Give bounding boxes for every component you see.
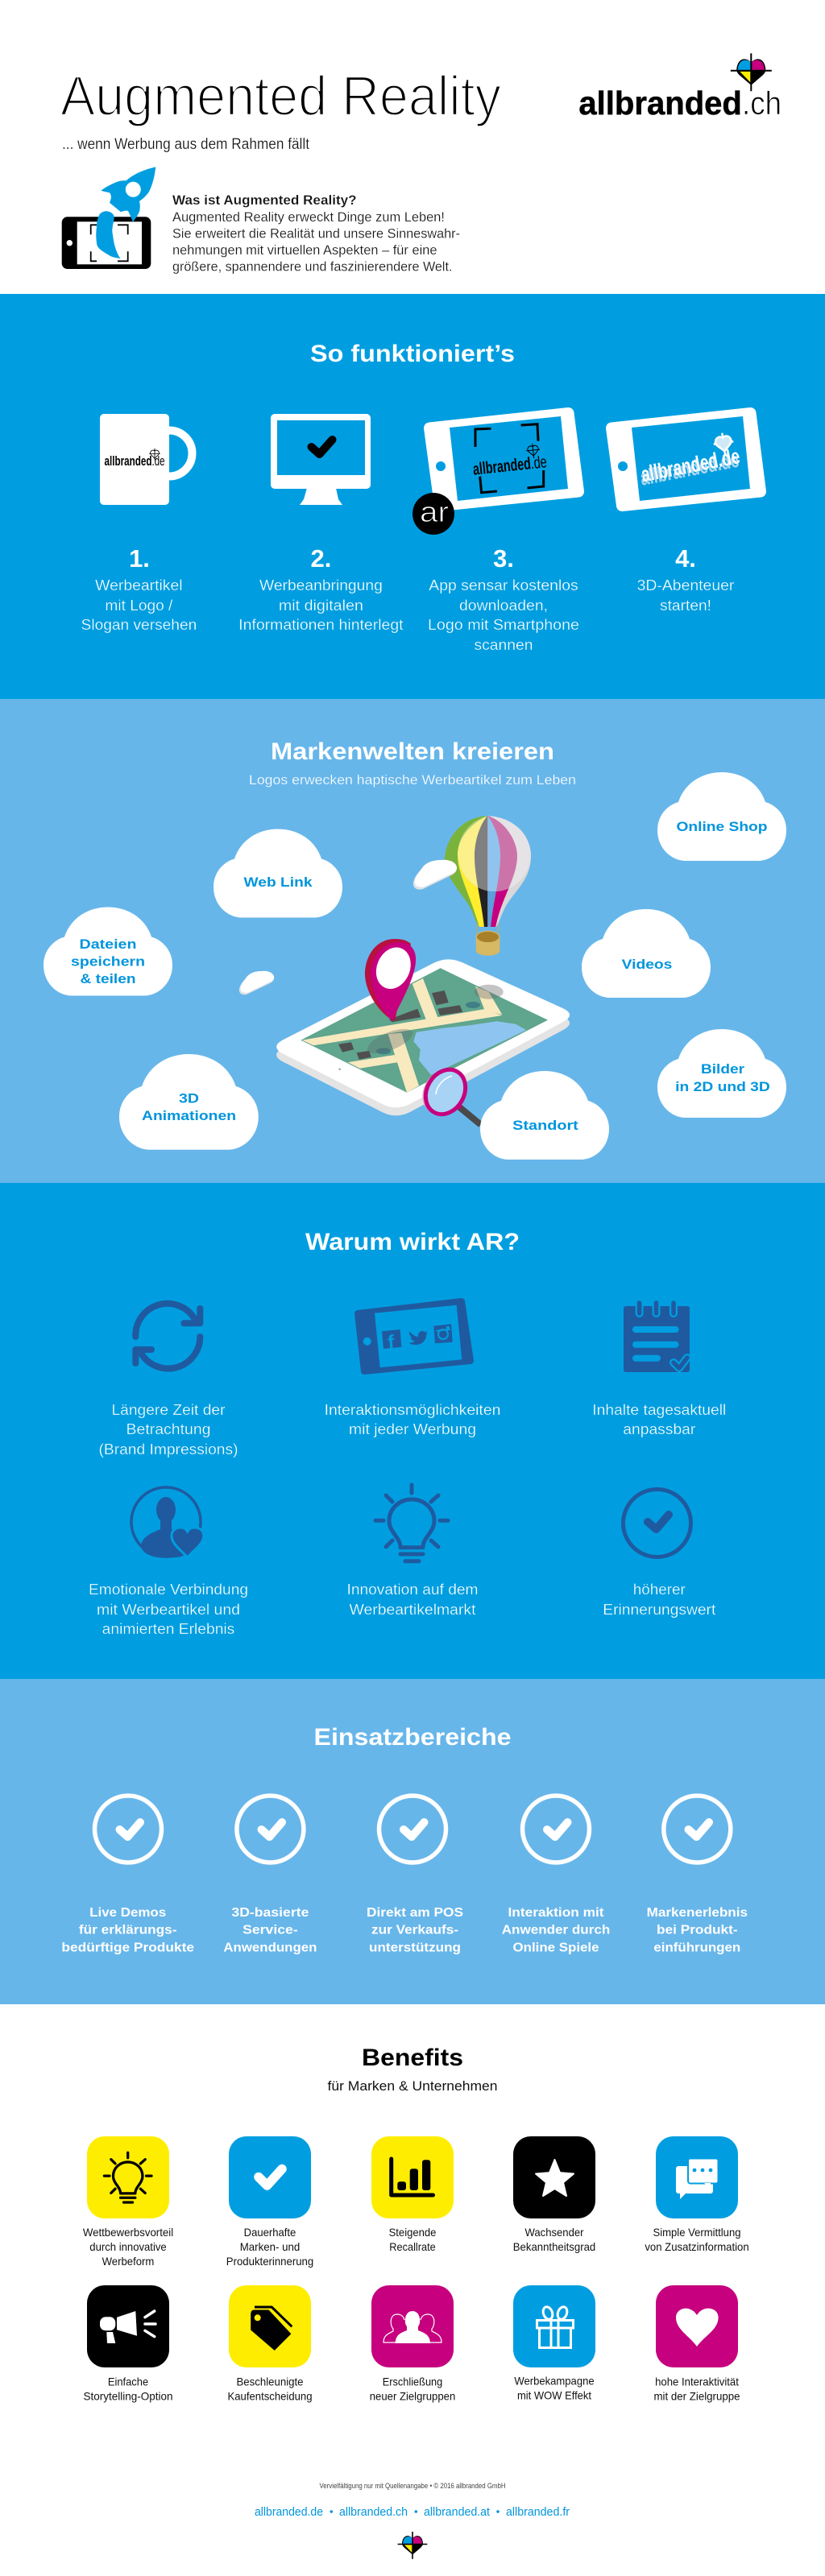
- cloud: Dateien speichern & teilen: & teilen: [81, 971, 135, 986]
- icon: refresh: [135, 1304, 200, 1368]
- item: Live Demos: [61, 1796, 194, 1955]
- cloud: Online Shop: [657, 772, 786, 861]
- cloud: Videos: [582, 909, 711, 998]
- icon: tablet with social media: [358, 1301, 471, 1371]
- benefit: Dauerhafte Erinnerung: Dauerhafte: [244, 2226, 296, 2239]
- text: Innovation: Innovation auf dem: [346, 1582, 479, 1598]
- domain links: [255, 2505, 570, 2519]
- step 2: 2.: [310, 544, 331, 573]
- cloud: Dateien speichern & teilen: [44, 907, 172, 995]
- icon: person with heart: [131, 1487, 204, 1558]
- cloud: Online Shop: Online Shop: [677, 819, 767, 834]
- small cloud left: [239, 971, 274, 994]
- panel: Warum wirkt AR?: [0, 1183, 825, 1679]
- header: [60, 53, 781, 274]
- cloud: Standort: [480, 1071, 609, 1160]
- step 3: 3.: [493, 544, 514, 573]
- text: Inhalte tagesaktuell: anpassbar: [623, 1421, 695, 1437]
- domain links: allbranded.de: [255, 2505, 323, 2519]
- benefit: Storytelling: Storytelling-Option: [84, 2390, 172, 2403]
- text block: Was ist Augmented Reality: Augmented Reality erweckt Dinge zum Leben!: [172, 210, 445, 225]
- step 3: App sensar kostenlos: [429, 577, 578, 593]
- cloud: Videos: Videos: [622, 957, 672, 972]
- benefit: Wachsender Bekanntheitsgrad: Bekanntheitsgrad: [513, 2240, 595, 2253]
- benefit: Kaufentscheidung: Kaufentscheidung: [227, 2390, 313, 2403]
- icon: magnifier: [415, 1062, 481, 1125]
- logo: allbranded.ch: [578, 53, 781, 122]
- subheading: Logos erwecken haptische Werbeartikel zum Leben: [249, 772, 576, 788]
- item: 3D-basierte: [223, 1796, 317, 1955]
- benefit: Wettbewerbsvorteil: durch innovative: [89, 2240, 167, 2253]
- step 4: 4.: [675, 544, 696, 573]
- text: Emotionale Verbindung: Emotionale Verbindung: [89, 1582, 248, 1598]
- step 1: Werbeartikel: [95, 577, 183, 593]
- item: 3D-basierte: Service-: [243, 1924, 298, 1937]
- icon: light bulb: [375, 1485, 448, 1561]
- domain links: allbranded.fr: [506, 2505, 570, 2519]
- step 4: starten!: [660, 597, 711, 614]
- step 2: Werbeanbringung: [259, 577, 383, 593]
- benefit: Storytelling: Einfache: [108, 2375, 148, 2388]
- item: Direkt am POS: unterstützung: [369, 1941, 461, 1955]
- heading: So funktioniert’s: [310, 341, 515, 367]
- text: Emotionale Verbindung: animierten Erlebnis: [102, 1621, 234, 1637]
- benefit: Interaktivität: hohe Interaktivität: [655, 2375, 739, 2388]
- cloud: Standort: Standort: [512, 1118, 578, 1133]
- benefit: Steigende Recallrate: Steigende: [389, 2226, 437, 2239]
- step 2: [238, 544, 404, 633]
- benefit: Wettbewerbsvorteil: [83, 2136, 173, 2268]
- text: Längere Zeit: [98, 1402, 238, 1458]
- footer: [255, 2482, 570, 2559]
- cloud: Web Link: Web Link: [243, 875, 313, 890]
- icon: heart crosshair: [731, 53, 772, 91]
- text: Interaktionsmöglichkeiten: mit jeder Werbung: [349, 1421, 476, 1437]
- subtitle: ... wenn Werbung aus dem Rahmen fällt: [62, 136, 310, 153]
- text block: Was ist Augmented Reality: nehmungen mit virtuellen Aspekten – für eine: [172, 243, 437, 258]
- item: Interaktion: Online Spiele: [512, 1941, 599, 1955]
- text: Längere Zeit: Längere Zeit der: [111, 1402, 226, 1418]
- benefit: Kaufentscheidung: Beschleunigte: [237, 2375, 304, 2388]
- cloud: 3D Animationen: 3D: [179, 1090, 199, 1106]
- logo: allbranded.ch: .ch: [742, 85, 781, 122]
- cloud: 3D Animationen: Animationen: [142, 1108, 236, 1123]
- step 2: mit digitalen: [279, 597, 363, 614]
- item: Direkt am POS: zur Verkaufs-: [371, 1924, 458, 1937]
- icon: map pin: [365, 939, 417, 1021]
- title: Augmented Reality: [60, 64, 501, 127]
- benefit: WOW Effekt: mit WOW Effekt: [517, 2388, 591, 2401]
- step 1: [81, 544, 197, 633]
- benefit: WOW Effekt: [513, 2285, 595, 2401]
- item: Interaktion: Anwender durch: [502, 1924, 610, 1937]
- step 2: Informationen hinterlegt: [238, 616, 404, 633]
- benefit: Dauerhafte Erinnerung: Produkterinnerung: [226, 2255, 313, 2268]
- step 1: 1.: [129, 544, 150, 573]
- item: Markenerlebnis: einführungen: [653, 1941, 740, 1955]
- benefit: Wachsender Bekanntheitsgrad: Wachsender: [525, 2226, 584, 2239]
- item: Live Demos: Live Demos: [89, 1906, 166, 1920]
- step 1: Slogan versehen: [81, 616, 197, 633]
- text: Inhalte tagesaktuell: Inhalte tagesaktuell: [592, 1402, 726, 1418]
- illustration: hot air balloon: [445, 816, 531, 956]
- text block: Was ist Augmented Reality: größere, spannendere und faszinierendere Welt.: [172, 259, 453, 274]
- panel: So funktioniert's: [0, 294, 825, 699]
- benefit: Storytelling: [84, 2285, 172, 2403]
- benefit: Steigende Recallrate: Recallrate: [389, 2240, 436, 2253]
- cloud: Web Link: [214, 829, 342, 918]
- small cloud near balloon: [413, 860, 457, 890]
- cloud: Bilder in 2D und 3D: in 2D und 3D: [675, 1079, 770, 1094]
- text block: Was ist Augmented Reality: Was ist Augmented Reality?: [172, 193, 357, 208]
- step 3: downloaden,: [459, 597, 548, 614]
- step 1: mit Logo /: [105, 597, 173, 614]
- panel: Benefits: [83, 2045, 749, 2403]
- cloud: 3D Animationen: [119, 1054, 259, 1150]
- text: höherer Erinnerungswert: höherer: [633, 1582, 686, 1598]
- text: Innovation: Werbeartikelmarkt: [350, 1602, 475, 1618]
- benefit: Simple Vermittlung: Simple Vermittlung: [653, 2226, 741, 2239]
- benefit: Simple Vermittlung: [645, 2136, 749, 2253]
- step 4: 3D-Abenteuer: [637, 577, 734, 593]
- item: Interaktion: Interaktion mit: [508, 1906, 604, 1920]
- copyright: Vervielfältigung nur mit Quellenangabe • © 2016 allbranded GmbH: [319, 2482, 506, 2491]
- icon: notepad: [624, 1303, 690, 1372]
- subheading: für Marken & Unternehmen: [327, 2078, 498, 2094]
- item: Markenerlebnis: Markenerlebnis: [647, 1906, 748, 1920]
- text: höherer Erinnerungswert: [603, 1582, 715, 1618]
- benefit: Wettbewerbsvorteil: Wettbewerbsvorteil: [83, 2226, 173, 2239]
- icon: check circle: [624, 1490, 691, 1557]
- icon: ar badge: ar: [420, 495, 449, 528]
- item: Live Demos: für erklärungs-: [79, 1924, 176, 1937]
- cloud: Dateien speichern & teilen: Dateien: [79, 937, 137, 952]
- benefit: Interaktivität: [654, 2285, 740, 2403]
- benefit: Zielgruppen: Erschließung: [383, 2375, 442, 2388]
- item: Direkt am POS: [367, 1796, 463, 1955]
- benefit: Zielgruppen: neuer Zielgruppen: [370, 2390, 455, 2403]
- benefit: Steigende Recallrate: [371, 2136, 454, 2253]
- benefit: Zielgruppen: [370, 2285, 455, 2403]
- benefit: Wachsender Bekanntheitsgrad: [513, 2136, 595, 2253]
- step 3: [428, 544, 579, 653]
- text block: Was ist Augmented Reality: Sie erweitert die Realität und unsere Sinneswahr-: [172, 227, 460, 242]
- cloud: Bilder in 2D und 3D: [657, 1029, 786, 1118]
- text: Interaktionsmöglichkeiten: Interaktionsmöglichkeiten: [325, 1402, 500, 1418]
- illustration: map tablet: [276, 959, 570, 1115]
- icon: phone scanning logo: allbranded: [472, 454, 532, 479]
- benefit: Wettbewerbsvorteil: Werbeform: [102, 2255, 154, 2268]
- benefit: WOW Effekt: Werbekampagne: [514, 2374, 595, 2387]
- benefit: Interaktivität: mit der Zielgruppe: [654, 2390, 740, 2403]
- item: Markenerlebnis: [647, 1796, 748, 1955]
- wordmark: allbranded: [578, 85, 742, 122]
- icon: phone with 3D logo: [611, 413, 761, 506]
- icon: mug: .de: [151, 453, 164, 469]
- cloud: Dateien speichern & teilen: speichern: [71, 953, 145, 970]
- text: Emotionale Verbindung: mit Werbeartikel und: [97, 1602, 240, 1618]
- text block: Was ist Augmented Reality: [172, 193, 460, 274]
- item: Markenerlebnis: bei Produkt-: [657, 1924, 738, 1937]
- text: Inhalte tagesaktuell: [592, 1402, 726, 1437]
- icon: phone with 3D logo: allbranded.de: [639, 444, 742, 486]
- heading: Einsatzbereiche: [314, 1724, 511, 1751]
- step 4: [637, 544, 734, 614]
- benefit: Kaufentscheidung: [227, 2285, 313, 2403]
- text: Längere Zeit: Betrachtung: [126, 1421, 211, 1437]
- icon: phone with 3D logo: allbranded.de: [638, 448, 741, 490]
- icon: ar badge: [412, 493, 454, 535]
- panel: Markenwelten kreieren: [0, 699, 825, 1183]
- icon: mug: allbranded: [105, 453, 151, 469]
- heading: Benefits: [362, 2045, 463, 2071]
- item: 3D-basierte: Anwendungen: [223, 1941, 317, 1955]
- icon: tablet with social media: f: [387, 1331, 396, 1354]
- panel: Einsatzbereiche: [0, 1679, 825, 2004]
- icon: phone scanning logo: .de: [529, 453, 548, 473]
- heading: Warum wirkt AR?: [305, 1229, 520, 1255]
- icon: phone scanning logo: [429, 413, 578, 506]
- item: Interaktion: [502, 1796, 610, 1955]
- step 3: Logo mit Smartphone: [428, 616, 579, 633]
- icon: tablet with rocket: [62, 167, 155, 269]
- item: 3D-basierte: 3D-basierte: [231, 1906, 309, 1920]
- icon: monitor: [271, 414, 371, 505]
- benefit: Dauerhafte Erinnerung: Marken- und: [240, 2240, 300, 2253]
- item: Live Demos: bedürftige Produkte: [61, 1941, 194, 1955]
- benefit: Dauerhafte Erinnerung: [226, 2136, 313, 2268]
- domain links: allbranded.ch: [339, 2505, 408, 2519]
- text: Innovation: [346, 1582, 479, 1618]
- text: höherer Erinnerungswert: Erinnerungswert: [603, 1602, 715, 1618]
- text: Emotionale Verbindung: [89, 1582, 248, 1637]
- text: Längere Zeit: (Brand Impressions): [98, 1441, 238, 1458]
- text: Interaktionsmöglichkeiten: [325, 1402, 500, 1437]
- item: Direkt am POS: Direkt am POS: [367, 1906, 463, 1920]
- step 3: scannen: [474, 636, 533, 653]
- benefit: Simple Vermittlung: von Zusatzinformation: [645, 2240, 749, 2253]
- cloud: Bilder in 2D und 3D: Bilder: [701, 1061, 744, 1077]
- domain links: allbranded.at: [424, 2505, 491, 2519]
- heading: Markenwelten kreieren: [271, 738, 554, 765]
- icon: heart crosshair: [398, 2532, 427, 2559]
- icon: mug: [100, 414, 192, 505]
